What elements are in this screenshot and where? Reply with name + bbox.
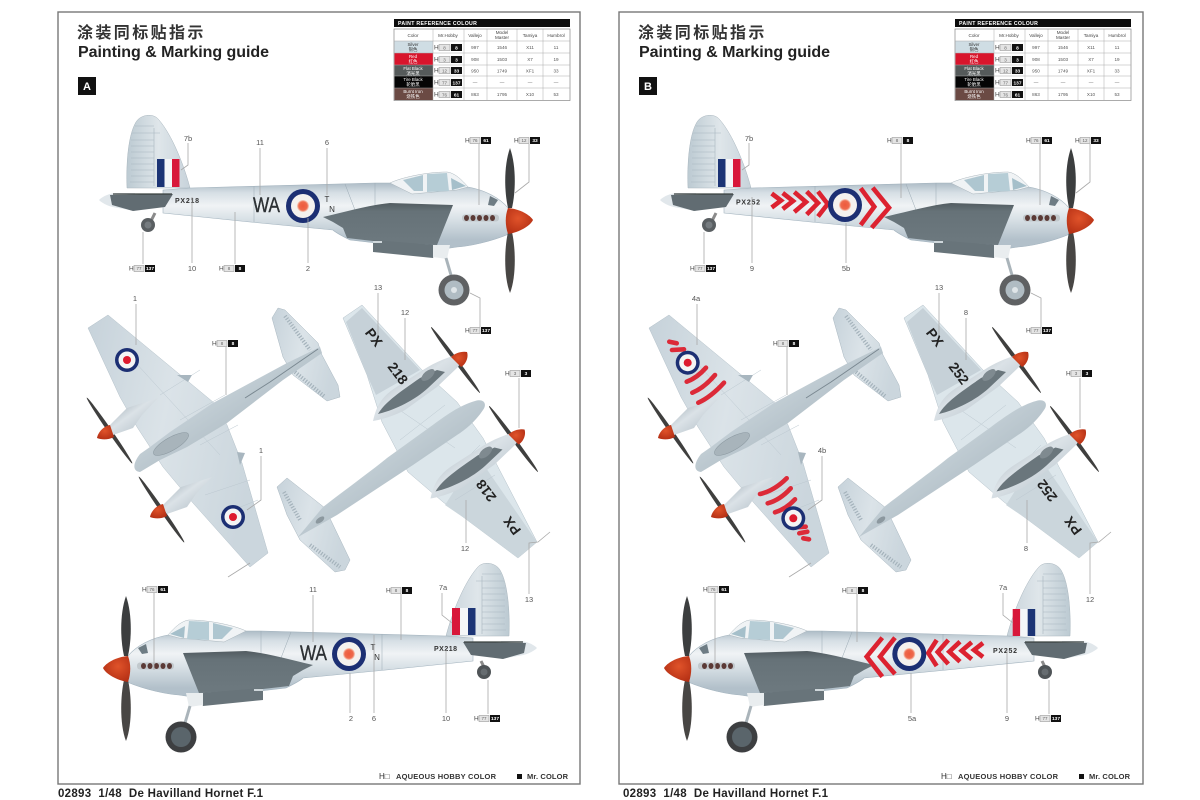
callouts: left side view A: H bbox=[474, 716, 479, 722]
callout H76 61: 61 bbox=[483, 138, 489, 144]
callouts: underside plan B: 4a bbox=[692, 294, 701, 303]
table: paint reference colour: — bbox=[554, 80, 559, 85]
main wheel bbox=[1000, 274, 1030, 306]
codes WA, T, N and serial bbox=[300, 642, 457, 665]
codes WA, T, N and serial bbox=[175, 194, 335, 217]
main wheel bbox=[438, 274, 470, 306]
table: paint reference colour: — bbox=[500, 80, 505, 85]
table: paint reference colour: XF1 bbox=[1087, 68, 1096, 74]
callouts: left side view A: 8 bbox=[395, 588, 398, 593]
table: paint reference colour: 950 bbox=[1032, 68, 1040, 74]
callouts: left side view A: 8 bbox=[406, 588, 409, 594]
callouts: right side view B: 77 bbox=[1033, 328, 1039, 333]
callout 7b bbox=[181, 134, 192, 170]
table: paint reference colour: — bbox=[1061, 80, 1066, 85]
table: paint reference colour: X7 bbox=[527, 57, 533, 62]
callout 2 bbox=[306, 218, 310, 273]
callouts: right side view B: 9 bbox=[750, 264, 754, 273]
callouts: right side view B: H bbox=[690, 266, 695, 272]
callout 10: 10 bbox=[188, 264, 196, 273]
callouts: underside plan A bbox=[133, 294, 263, 577]
tail wheel bbox=[477, 665, 491, 679]
callouts: upper plan A bbox=[374, 283, 550, 604]
callouts: left side view B: 5a bbox=[908, 714, 917, 723]
legend: paint brands B: Mr. COLOR bbox=[1089, 772, 1131, 781]
table: paint reference colour: 红色 bbox=[409, 58, 418, 64]
table: paint reference colour: 红色 bbox=[970, 58, 979, 64]
wing serials: 218 bbox=[385, 359, 412, 388]
aircraft: left side view, scheme B bbox=[664, 563, 1098, 752]
callouts: right side view B: 5b bbox=[842, 264, 850, 273]
table: paint reference colour: 12 bbox=[1003, 68, 1008, 73]
callout H8 8: H bbox=[219, 266, 224, 272]
table: paint reference colour: — bbox=[1115, 80, 1120, 85]
table: paint reference colour: 33 bbox=[454, 68, 459, 74]
table: paint reference colour bbox=[955, 19, 1131, 100]
codes WA, T, N and serial: WA bbox=[300, 642, 327, 665]
callout wheel H77 137: 77 bbox=[472, 328, 478, 333]
table: paint reference colour: Flat Black bbox=[403, 66, 423, 71]
title: painting and marking guide bbox=[638, 19, 830, 61]
table: paint reference colour: 8 bbox=[455, 45, 458, 51]
callouts: right side view B: 7b bbox=[745, 134, 753, 143]
wing serials: PX bbox=[923, 325, 947, 350]
callout 7b: 7b bbox=[184, 134, 192, 143]
callouts: upper plan A: 3 bbox=[514, 371, 517, 376]
table: paint reference colour: 轮胎黑 bbox=[967, 81, 981, 88]
table: paint reference colour: Master bbox=[495, 35, 509, 40]
codes WA, T, N and serial: N bbox=[374, 653, 380, 662]
table: paint reference colour: 银色 bbox=[409, 46, 418, 53]
callouts: right side view B: H bbox=[1075, 138, 1080, 144]
callouts: left side view B: 76 bbox=[710, 587, 716, 592]
callouts: left side view A: 11 bbox=[309, 585, 317, 594]
callouts: upper plan B: 13 bbox=[935, 283, 943, 292]
callouts: right side view B bbox=[690, 134, 1101, 334]
callouts: upper plan A: H bbox=[505, 370, 510, 378]
table: paint reference colour: Humbrol bbox=[547, 33, 565, 38]
callout wheel H77 137 bbox=[465, 293, 491, 334]
callout 2: 2 bbox=[306, 264, 310, 273]
aircraft: underside plan view, scheme B bbox=[646, 308, 901, 567]
table: paint reference colour: Model bbox=[496, 30, 508, 35]
callout H8 8: 8 bbox=[239, 266, 242, 272]
callouts: underside plan A: 8 bbox=[232, 341, 235, 347]
codes WA, T, N and serial: T bbox=[325, 195, 330, 204]
table: paint reference colour: 11 bbox=[1115, 45, 1120, 50]
fuselage chevrons bbox=[867, 638, 983, 677]
callouts: underside plan B: 4b bbox=[818, 446, 826, 455]
table: paint reference colour: 53 bbox=[553, 92, 559, 97]
callout 6 bbox=[325, 138, 329, 195]
callouts: upper plan B bbox=[935, 283, 1111, 604]
table: paint reference colour: 53 bbox=[1114, 92, 1120, 97]
table: paint reference colour: 1749 bbox=[1058, 68, 1069, 74]
callouts: underside plan B: 8 bbox=[782, 341, 785, 346]
callouts: left side view B: 77 bbox=[1042, 716, 1048, 721]
legend: paint brands A: AQUEOUS HOBBY COLOR bbox=[396, 772, 497, 781]
table: paint reference colour: X10 bbox=[526, 92, 535, 97]
table: paint reference colour: 863 bbox=[1032, 92, 1040, 97]
aircraft: upper plan view, scheme A bbox=[277, 305, 540, 572]
table: paint reference colour: Silver bbox=[408, 42, 419, 47]
table: paint reference colour: H bbox=[434, 56, 439, 64]
roundel bbox=[828, 188, 862, 222]
table: paint reference colour: XF1 bbox=[526, 68, 535, 74]
table: paint reference colour: Mr.Hobby bbox=[438, 33, 459, 38]
callouts: underside plan A: 1 bbox=[259, 446, 263, 455]
table: paint reference colour: H bbox=[995, 80, 1000, 86]
table: paint reference colour: 1795 bbox=[497, 92, 508, 97]
table: paint reference colour: 997 bbox=[471, 45, 479, 50]
callout H76 61 bbox=[465, 137, 491, 205]
callout H12 33: H bbox=[514, 138, 519, 144]
callout H77 137: H bbox=[129, 266, 134, 272]
aircraft: right side view, scheme A bbox=[99, 115, 533, 306]
table: paint reference colour: Tamiya bbox=[1084, 33, 1099, 38]
table: paint reference colour: H bbox=[995, 68, 1000, 74]
main wheel bbox=[166, 722, 196, 752]
fin flash bbox=[1013, 609, 1035, 636]
table: paint reference colour: Tire Black bbox=[403, 77, 423, 82]
callouts: left side view A: 2 bbox=[349, 714, 353, 723]
table: paint reference colour: 轮胎黑 bbox=[406, 81, 420, 88]
callouts: right side view B: H bbox=[887, 138, 892, 144]
callouts: left side view B: 61 bbox=[721, 587, 727, 593]
table: paint reference colour: 8 bbox=[443, 45, 446, 50]
table: paint reference colour: Vallejo bbox=[1029, 33, 1043, 38]
footer: kit title B: 02893 1/48 De Havilland Hornet F.1 bbox=[623, 788, 829, 800]
callout H8 8: 8 bbox=[228, 266, 231, 271]
wing serials: PX bbox=[500, 513, 524, 538]
codes WA, T, N and serial: PX218 bbox=[434, 646, 457, 653]
table: paint reference colour: 137 bbox=[452, 80, 461, 86]
badge: scheme letter B: B bbox=[644, 81, 652, 93]
callouts: left side view B: H bbox=[703, 586, 708, 594]
wing serials: 252 bbox=[946, 359, 973, 388]
callouts: left side view A: 7a bbox=[439, 583, 448, 592]
table: paint reference colour: X7 bbox=[1088, 57, 1094, 62]
callouts: upper plan A: 3 bbox=[525, 371, 528, 377]
aircraft: underside plan view, scheme A bbox=[85, 308, 340, 567]
wing roundels bbox=[115, 348, 245, 529]
callouts: left side view A: H bbox=[142, 586, 147, 594]
tail wheel bbox=[141, 218, 155, 232]
callouts: right side view B: 76 bbox=[1033, 138, 1039, 143]
table: paint reference colour: H bbox=[995, 44, 1000, 52]
callouts: left side view A: 137 bbox=[491, 716, 499, 722]
table: paint reference colour: Color bbox=[969, 33, 980, 38]
table: paint reference colour: 1546 bbox=[497, 45, 508, 50]
callouts: left side view A: 10 bbox=[442, 714, 450, 723]
table: paint reference colour: 消光黑 bbox=[406, 70, 420, 77]
callouts: underside plan B: 8 bbox=[793, 341, 796, 347]
fin flash bbox=[452, 608, 476, 635]
callouts: upper plan A: 13 bbox=[374, 283, 382, 292]
wing serials: 252 bbox=[1033, 476, 1060, 505]
table: paint reference colour: 863 bbox=[471, 92, 479, 97]
table: paint reference colour: Master bbox=[1056, 35, 1070, 40]
callout H12 33: 33 bbox=[532, 138, 538, 144]
callouts: left side view A: 76 bbox=[149, 587, 155, 592]
legend: paint brands A: H□ bbox=[379, 772, 390, 781]
wing serials: PX bbox=[362, 325, 386, 350]
table: paint reference colour: — bbox=[473, 80, 478, 85]
serial: PX252 bbox=[993, 648, 1017, 655]
callout H12 33: 12 bbox=[521, 138, 527, 143]
roundel bbox=[332, 637, 366, 671]
callout wheel H77 137: 137 bbox=[482, 328, 490, 334]
callout H8 8 bbox=[219, 212, 245, 272]
codes WA, T, N and serial: N bbox=[329, 205, 335, 214]
callouts: left side view A: H bbox=[386, 588, 391, 594]
title: painting and marking guide: Painting & Marking guide bbox=[78, 44, 269, 61]
callouts: underside plan B bbox=[692, 294, 826, 577]
badge: scheme letter A: A bbox=[83, 81, 91, 93]
table: paint reference colour: 1749 bbox=[497, 68, 508, 74]
table: paint reference colour: PAINT REFERENCE COLOUR bbox=[959, 21, 1038, 27]
codes WA, T, N and serial: T bbox=[371, 643, 376, 652]
table: paint reference colour: X11 bbox=[1087, 45, 1095, 50]
legend: paint brands B: AQUEOUS HOBBY COLOR bbox=[958, 772, 1059, 781]
callouts: left side view B: 8 bbox=[851, 588, 854, 593]
table: paint reference colour: 3 bbox=[455, 57, 458, 63]
wing serials: PX bbox=[1061, 513, 1085, 538]
callouts: left side view B: H bbox=[842, 588, 847, 594]
callouts: left side view B: H bbox=[1035, 716, 1040, 722]
panel: scheme A bbox=[58, 12, 580, 784]
legend: paint brands A: Mr. COLOR bbox=[527, 772, 569, 781]
tail wheel bbox=[1038, 665, 1052, 679]
table: paint reference colour: 33 bbox=[1015, 68, 1020, 74]
callouts: right side view B: 61 bbox=[1044, 138, 1050, 144]
table: paint reference colour: 19 bbox=[553, 57, 559, 62]
callouts: left side view B bbox=[703, 583, 1061, 723]
callouts: upper plan A: 12 bbox=[401, 308, 409, 317]
table: paint reference colour: Silver bbox=[969, 42, 980, 47]
table: paint reference colour: 3 bbox=[1016, 57, 1019, 63]
table: paint reference colour: 12 bbox=[442, 68, 447, 73]
table: paint reference colour: Burnt Iron bbox=[403, 89, 423, 94]
table: paint reference colour: Color bbox=[408, 33, 419, 38]
serial: PX252 bbox=[736, 200, 760, 206]
table: paint reference colour: H bbox=[434, 68, 439, 74]
table: paint reference colour: 77 bbox=[442, 80, 447, 85]
callout H77 137: 77 bbox=[136, 266, 142, 271]
table: paint reference colour: 3 bbox=[1004, 57, 1007, 62]
table: paint reference colour: — bbox=[1089, 80, 1094, 85]
table: paint reference colour: H bbox=[995, 92, 1000, 98]
table: paint reference colour: 61 bbox=[454, 92, 459, 98]
callout 11 bbox=[256, 138, 264, 195]
table: paint reference colour: Vallejo bbox=[468, 33, 482, 38]
callout H77 137 bbox=[129, 232, 155, 272]
callouts: upper plan B: H bbox=[1066, 370, 1071, 378]
fin flash bbox=[718, 159, 740, 187]
callouts: right side view B: 137 bbox=[707, 266, 715, 272]
table: paint reference colour bbox=[394, 19, 570, 100]
table: paint reference colour: 33 bbox=[553, 68, 559, 74]
table: paint reference colour: H bbox=[434, 92, 439, 98]
table: paint reference colour: Tamiya bbox=[523, 33, 538, 38]
callouts: left side view B: 9 bbox=[1005, 714, 1009, 723]
table: paint reference colour: 77 bbox=[1003, 80, 1008, 85]
callouts: left side view A: 61 bbox=[160, 587, 166, 593]
table: paint reference colour: 烧铁色 bbox=[406, 93, 420, 100]
wing serials bbox=[362, 325, 524, 538]
callouts: upper plan A: 13 bbox=[525, 595, 533, 604]
table: paint reference colour: H bbox=[434, 44, 439, 52]
callouts: upper plan B: 3 bbox=[1086, 371, 1089, 377]
table: paint reference colour: 19 bbox=[1114, 57, 1120, 62]
callouts: upper plan B: 12 bbox=[1086, 595, 1094, 604]
tail wheel bbox=[702, 218, 716, 232]
callouts: left side view A: 77 bbox=[481, 716, 487, 721]
callouts: upper plan A: 12 bbox=[461, 544, 469, 553]
wing serials: 218 bbox=[472, 476, 499, 505]
wing roundels bbox=[676, 351, 805, 530]
table: paint reference colour: 908 bbox=[1032, 57, 1040, 62]
callouts: left side view B: 137 bbox=[1052, 716, 1060, 722]
callout wheel H77 137: H bbox=[465, 328, 470, 334]
table: paint reference colour: X10 bbox=[1087, 92, 1096, 97]
table: paint reference colour: — bbox=[528, 80, 533, 85]
panel: scheme B bbox=[619, 12, 1143, 784]
callouts: underside plan A: H bbox=[212, 340, 217, 348]
table: paint reference colour: Red bbox=[970, 54, 979, 59]
table: paint reference colour: Red bbox=[409, 54, 418, 59]
callouts: left side view A bbox=[142, 583, 500, 723]
callout 6: 6 bbox=[325, 138, 329, 147]
wing serials bbox=[923, 325, 1085, 538]
table: paint reference colour: 消光黑 bbox=[967, 70, 981, 77]
callouts: underside plan B: H bbox=[773, 340, 778, 348]
callouts: upper plan B: 3 bbox=[1075, 371, 1078, 376]
callouts: right side view B: 77 bbox=[697, 266, 703, 271]
callout 10 bbox=[188, 197, 196, 273]
callouts: left side view B: 7a bbox=[999, 583, 1008, 592]
callouts: left side view B: 8 bbox=[862, 588, 865, 594]
main wheel bbox=[726, 722, 758, 752]
callout H76 61: 76 bbox=[472, 138, 478, 143]
codes WA, T, N and serial: PX218 bbox=[175, 198, 199, 205]
roundel bbox=[286, 189, 320, 223]
table: paint reference colour: 76 bbox=[442, 92, 447, 97]
table: paint reference colour: 997 bbox=[1032, 45, 1040, 50]
wing stripes bbox=[669, 342, 809, 539]
table: paint reference colour: 8 bbox=[1004, 45, 1007, 50]
legend: paint brands B: H□ bbox=[941, 772, 952, 781]
footer: kit title A: 02893 1/48 De Havilland Hornet F.1 bbox=[58, 788, 264, 800]
table: paint reference colour: Mr.Hobby bbox=[999, 33, 1020, 38]
table: paint reference colour: Humbrol bbox=[1108, 33, 1126, 38]
labels: side view A callouts bbox=[129, 134, 540, 334]
callout H77 137: 137 bbox=[146, 266, 154, 272]
callouts: underside plan A: 1 bbox=[133, 294, 137, 303]
legend: paint brands A bbox=[379, 772, 569, 781]
callouts: left side view A: 6 bbox=[372, 714, 376, 723]
aircraft: upper plan view, scheme B bbox=[838, 305, 1101, 572]
table: paint reference colour: 8 bbox=[1016, 45, 1019, 51]
callouts: right side view B: H bbox=[1026, 328, 1031, 334]
codes WA, T, N and serial: WA bbox=[253, 194, 280, 217]
table: paint reference colour: 1795 bbox=[1058, 92, 1069, 97]
callouts: underside plan A: 8 bbox=[221, 341, 224, 346]
callouts: right side view B: 137 bbox=[1043, 328, 1051, 334]
table: paint reference colour: 银色 bbox=[970, 46, 979, 53]
callouts: upper plan B: 8 bbox=[964, 308, 968, 317]
table: paint reference colour: X11 bbox=[526, 45, 534, 50]
table: paint reference colour: 1546 bbox=[1058, 45, 1069, 50]
callouts: right side view B: 8 bbox=[896, 138, 899, 143]
aircraft: right side view, scheme B bbox=[660, 115, 1094, 306]
callouts: right side view B: 8 bbox=[907, 138, 910, 144]
table: paint reference colour: 137 bbox=[1013, 80, 1022, 86]
table: paint reference colour: 61 bbox=[1015, 92, 1020, 98]
table: paint reference colour: Flat Black bbox=[964, 66, 984, 71]
table: paint reference colour: 11 bbox=[554, 45, 559, 50]
callouts: right side view B: H bbox=[1026, 138, 1031, 144]
callout H76 61: H bbox=[465, 138, 470, 144]
callouts: upper plan B: 8 bbox=[1024, 544, 1028, 553]
roundel bbox=[892, 637, 926, 671]
badge: scheme letter B bbox=[639, 77, 657, 95]
table: paint reference colour: PAINT REFERENCE COLOUR bbox=[398, 21, 477, 27]
table: paint reference colour: 950 bbox=[471, 68, 479, 74]
table: paint reference colour: 76 bbox=[1003, 92, 1008, 97]
table: paint reference colour: Model bbox=[1057, 30, 1069, 35]
fin flash bbox=[157, 159, 180, 187]
table: paint reference colour: 3 bbox=[443, 57, 446, 62]
fuselage chevrons bbox=[772, 188, 889, 228]
table: paint reference colour: 烧铁色 bbox=[967, 93, 981, 100]
title: painting and marking guide: 涂装同标贴指示 bbox=[77, 19, 206, 43]
table: paint reference colour: 1503 bbox=[1058, 57, 1069, 62]
title: painting and marking guide: Painting & Marking guide bbox=[639, 44, 830, 61]
title: painting and marking guide bbox=[77, 19, 269, 61]
aircraft: left side view, scheme A bbox=[103, 563, 537, 752]
callouts: right side view B: 33 bbox=[1093, 138, 1099, 144]
badge: scheme letter A bbox=[78, 77, 96, 95]
callout 11: 11 bbox=[256, 138, 264, 147]
callouts: right side view B: 12 bbox=[1082, 138, 1088, 143]
legend: paint brands B bbox=[941, 772, 1131, 781]
table: paint reference colour: 1503 bbox=[497, 57, 508, 62]
table: paint reference colour: Tire Black bbox=[964, 77, 984, 82]
title: painting and marking guide: 涂装同标贴指示 bbox=[638, 19, 767, 43]
table: paint reference colour: 908 bbox=[471, 57, 479, 62]
table: paint reference colour: — bbox=[1034, 80, 1039, 85]
callout H12 33 bbox=[514, 137, 540, 193]
table: paint reference colour: Burnt Iron bbox=[964, 89, 984, 94]
table: paint reference colour: H bbox=[995, 56, 1000, 64]
table: paint reference colour: 33 bbox=[1114, 68, 1120, 74]
table: paint reference colour: H bbox=[434, 80, 439, 86]
